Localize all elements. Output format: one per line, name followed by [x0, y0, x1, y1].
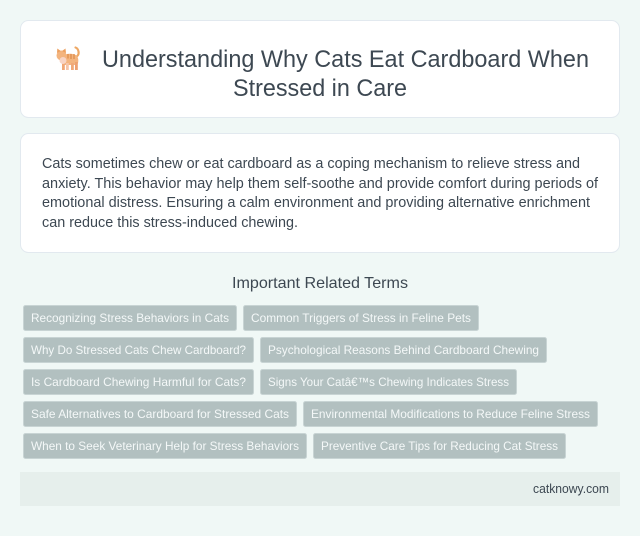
text block: description: anxiety. This behavior may help them self-soothe and provide comfort during periods of [42, 176, 599, 192]
icon: cat [56, 48, 79, 70]
heading: important related terms: Important Related Terms [232, 275, 408, 292]
footer [20, 472, 620, 506]
title [102, 46, 589, 102]
panel: title card [20, 20, 620, 118]
tag: Preventive Care Tips for Reducing Cat Stress [321, 439, 558, 453]
tag [314, 434, 566, 458]
tag [244, 306, 478, 330]
title: Understanding Why Cats Eat Cardboard When [102, 46, 589, 73]
tag: Why Do Stressed Cats Chew Cardboard? [31, 343, 246, 357]
panel: description card [20, 134, 620, 252]
tag: Safe Alternatives to Cardboard for Stressed Cats [31, 407, 289, 421]
footer: catknowy.com [533, 481, 609, 496]
title: Stressed in Care [233, 75, 407, 102]
text block: description [42, 156, 599, 231]
tag [260, 370, 516, 394]
tag: Signs Your Catâ€™s Chewing Indicates Stress [268, 375, 509, 389]
tag [260, 338, 546, 362]
tag [24, 338, 254, 362]
tag [24, 306, 236, 330]
text block: description: emotional distress. Ensuring a calm environment and providing alternative enrichment [42, 195, 590, 211]
tag [24, 402, 296, 426]
text block: description: Cats sometimes chew or eat cardboard as a coping mechanism to relieve stress and [42, 156, 580, 172]
tag [24, 434, 306, 458]
tag: Is Cardboard Chewing Harmful for Cats? [31, 375, 246, 389]
tag list [24, 306, 598, 458]
tag: When to Seek Veterinary Help for Stress Behaviors [31, 439, 299, 453]
tag [304, 402, 598, 426]
text block: description: can reduce this stress-induced chewing. [42, 215, 298, 231]
tag [24, 370, 254, 394]
tag: Common Triggers of Stress in Feline Pets [251, 311, 471, 325]
tag: Recognizing Stress Behaviors in Cats [31, 311, 229, 325]
tag: Psychological Reasons Behind Cardboard Chewing [268, 343, 539, 357]
tag: Environmental Modifications to Reduce Feline Stress [311, 407, 590, 421]
